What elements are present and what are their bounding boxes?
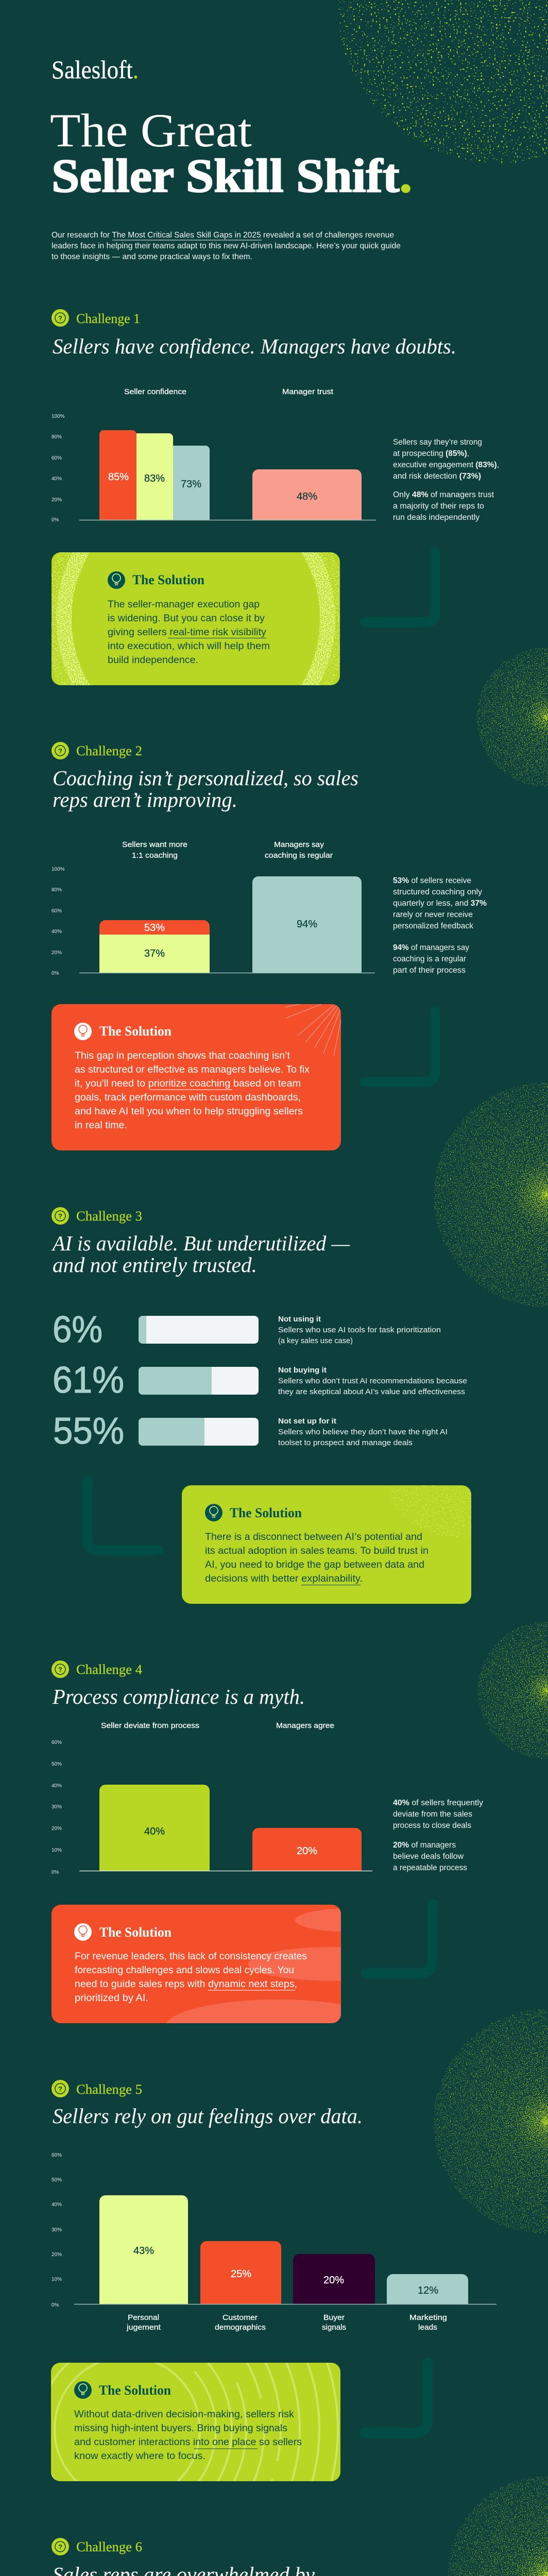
bar chart: seller confidence vs manager trust: 0%	[52, 517, 59, 523]
challenge 3 heading	[51, 1231, 350, 1277]
panel: solution 2: goals, track performance with custom dashboards,	[75, 1092, 301, 1103]
side text: challenge 2: 53% of sellers receive	[393, 876, 471, 885]
bar chart: seller confidence vs manager trust: 40%	[52, 476, 62, 482]
bar chart: process	[52, 1721, 372, 1875]
panel: solution 4: prioritized by AI.	[75, 1992, 148, 2004]
challenge 6 header	[52, 2538, 142, 2555]
stat: not using it	[53, 1309, 441, 1350]
bar chart: seller confidence vs manager trust: 85%	[108, 471, 129, 483]
side text: challenge 2: structured coaching only	[393, 888, 482, 896]
side text: challenge 1: at prospecting (85%),	[393, 449, 469, 458]
bar chart: data sources: 40%	[52, 2202, 62, 2208]
stat: not buying it: Not buying it	[278, 1366, 327, 1375]
challenge 1 heading: Sellers have confidence. Managers have doubts.	[53, 334, 456, 358]
panel: solution 2: and have AI tell you when to help struggling sellers	[75, 1106, 303, 1117]
section: challenge 4	[52, 1660, 483, 2055]
side text: challenge 4	[393, 1799, 483, 1872]
bar chart: process: 30%	[52, 1804, 62, 1810]
panel: solution 2: in real time.	[75, 1120, 127, 1131]
bar chart: data sources: 20%	[323, 2275, 344, 2286]
stat: not set up for it	[53, 1411, 448, 1452]
challenge 2 header: ?	[58, 747, 62, 755]
challenge 4 header: Challenge 4	[76, 1662, 142, 1677]
challenge 4 header: ?	[58, 1666, 62, 1673]
section: challenge 6	[52, 2538, 315, 2576]
connector arrow 4	[366, 1904, 433, 1973]
panel: solution 2: it, you'll need to prioritize coaching based on team	[75, 1078, 301, 1089]
icon: light bulb	[108, 571, 125, 589]
stat: not buying it: Sellers who don’t trust AI recommendations because	[278, 1377, 467, 1385]
challenge 2 heading: Coaching isn’t personalized, so sales	[53, 766, 358, 790]
panel: solution 1: is widening. But you can close it by	[108, 613, 265, 624]
panel: solution 3: its actual adoption in sales teams. To build trust in	[205, 1545, 429, 1556]
bar chart: seller confidence vs manager trust	[52, 387, 376, 523]
challenge 3 header: Challenge 3	[76, 1209, 142, 1224]
side text: challenge 2: personalized feedback	[393, 922, 473, 930]
dot cluster: challenge 6	[447, 2476, 548, 2576]
challenge 2 header: Challenge 2	[76, 743, 142, 758]
panel: solution 2: This gap in perception shows that coaching isn’t	[75, 1050, 290, 1061]
side text: challenge 1: a majority of their reps to	[393, 502, 484, 511]
panel: solution 5	[51, 2363, 340, 2481]
stat: not set up for it: 55%	[53, 1411, 124, 1452]
bar chart: seller confidence vs manager trust: 80%	[52, 434, 62, 440]
side text: challenge 4: a repeatable process	[393, 1863, 467, 1872]
bar chart: seller confidence vs manager trust: 20%	[52, 497, 62, 503]
challenge 3 header	[52, 1207, 142, 1225]
icon: light bulb	[74, 1923, 92, 1941]
bar chart: coaching: 94%	[297, 919, 317, 930]
bar chart: coaching: Sellers want more	[122, 840, 187, 849]
side text: challenge 2: 94% of managers say	[393, 943, 469, 952]
bar chart: data sources: signals	[322, 2323, 346, 2332]
section: challenge 2	[52, 742, 487, 1150]
stat: not using it: Not using it	[278, 1315, 321, 1324]
bar chart: data sources: demographics	[215, 2323, 266, 2332]
title: Seller Skill Shift .	[52, 149, 412, 202]
panel: solution 1: The seller-manager execution gap	[108, 599, 260, 610]
dot cluster: challenge 3	[433, 1081, 548, 1308]
stat: not using it: 6%	[53, 1309, 102, 1350]
bar chart: data sources: 10%	[52, 2277, 62, 2282]
challenge 2 header	[52, 742, 142, 759]
dot cluster: top right	[335, 0, 548, 165]
bar chart: process: 60%	[52, 1740, 62, 1745]
challenge 2 heading	[53, 766, 358, 811]
bar chart: coaching	[52, 840, 375, 976]
side text: challenge 2: quarterly or less, and 37%	[393, 899, 487, 908]
bar chart: coaching: 80%	[52, 887, 62, 893]
panel: solution 3: The Solution	[230, 1505, 302, 1520]
section: challenge 5	[51, 2080, 496, 2481]
bar chart: data sources: 20%	[52, 2252, 62, 2258]
bar chart: data sources: 60%	[52, 2153, 62, 2158]
dot cluster: challenge 2	[476, 647, 548, 787]
challenge 5 header: Challenge 5	[76, 2082, 142, 2097]
icon: light bulb	[74, 1023, 92, 1040]
title	[50, 104, 412, 202]
connector arrow 1	[365, 552, 435, 622]
stat: not buying it: 61%	[53, 1360, 124, 1401]
challenge 1 header: Challenge 1	[76, 311, 140, 326]
challenge 4 header	[52, 1660, 142, 1678]
panel: solution 1: The Solution	[132, 572, 205, 587]
bar chart: process: 40%	[144, 1826, 165, 1837]
connector arrow 2	[365, 1012, 435, 1082]
challenge 4 heading: Process compliance is a myth.	[52, 1685, 305, 1708]
challenge 5 header	[52, 2080, 142, 2097]
bar chart: data sources	[52, 2153, 496, 2332]
bar chart: coaching: 37%	[144, 948, 165, 959]
stat: not set up for it: Not set up for it	[278, 1417, 336, 1426]
intro text: to those insights — and some practical ways to fix them.	[52, 252, 252, 261]
title: The Great	[50, 104, 252, 157]
bar chart: data sources: 0%	[52, 2302, 59, 2308]
side text: challenge 4: 40% of sellers frequently	[393, 1799, 483, 1807]
bar chart: seller confidence vs manager trust: 83%	[144, 473, 165, 484]
panel: solution 3: decisions with better explainability.	[205, 1573, 363, 1584]
challenge 5 heading: Sellers rely on gut feelings over data.	[53, 2104, 363, 2128]
connector arrow 5	[365, 2363, 427, 2433]
side text: challenge 2: part of their process	[393, 966, 466, 975]
bar chart: seller confidence vs manager trust: Manager trust	[282, 387, 334, 396]
section: challenge 3	[52, 1207, 471, 1604]
panel: solution 2	[52, 994, 346, 1150]
bar chart: coaching: 60%	[52, 908, 62, 914]
bar chart: data sources: 25%	[231, 2268, 251, 2280]
bar chart: data sources: leads	[418, 2323, 437, 2332]
challenge 5 header: ?	[58, 2085, 62, 2093]
panel: solution 5: Without data-driven decision-making, sellers risk	[74, 2409, 294, 2420]
bar chart: process: 20%	[297, 1845, 317, 1857]
side text: challenge 4: process to close deals	[393, 1821, 471, 1830]
side text: challenge 1	[393, 438, 499, 522]
intro text: Our research for The Most Critical Sales Skill Gaps in 2025 revealed a set of challenges revenue	[52, 231, 394, 240]
panel: solution 1: into execution, which will help them	[108, 640, 270, 652]
panel: solution 5: and customer interactions into one place so sellers	[74, 2436, 302, 2448]
dot cluster: challenge 5	[433, 2008, 548, 2235]
panel: solution 1: build independence.	[108, 654, 198, 666]
intro text	[52, 231, 401, 261]
icon: light bulb	[205, 1504, 222, 1521]
bar chart: seller confidence vs manager trust: 60%	[52, 455, 62, 461]
panel: solution 5: The Solution	[99, 2383, 172, 2398]
stat: not buying it: they are skeptical about AI’s value and effectiveness	[278, 1387, 465, 1396]
panel: solution 4: The Solution	[99, 1925, 172, 1940]
side text: challenge 1: executive engagement (83%),	[393, 461, 499, 469]
side text: challenge 4: 20% of managers	[393, 1841, 456, 1850]
dot cluster: challenge 4	[477, 1621, 548, 1759]
bar chart: coaching: coaching is regular	[265, 851, 333, 860]
bar chart: data sources: 12%	[418, 2285, 438, 2296]
panel: solution 4: For revenue leaders, this lack of consistency creates	[75, 1951, 307, 1962]
panel: solution 3: AI, you need to bridge the gap between data and	[205, 1559, 424, 1570]
bar chart: coaching: 20%	[52, 950, 62, 956]
panel: solution 5: missing high-intent buyers. Bring buying signals	[74, 2422, 287, 2434]
bar chart: process: 40%	[52, 1783, 62, 1789]
connector arrow 3	[88, 1481, 158, 1550]
side text: challenge 2: coaching is a regular	[393, 955, 466, 963]
side text: challenge 1: Only 48% of managers trust	[393, 490, 494, 499]
side text: challenge 4: believe deals follow	[393, 1852, 464, 1861]
logo: Salesloft.	[52, 55, 139, 84]
stat: not buying it	[53, 1360, 467, 1401]
challenge 1 header: ?	[58, 314, 62, 322]
stat: not set up for it: toolset to prospect and manage deals	[278, 1438, 413, 1447]
bar chart: process: Managers agree	[276, 1721, 334, 1730]
side text: challenge 1: run deals independently	[393, 513, 480, 522]
bar chart: process: Seller deviate from process	[101, 1721, 199, 1730]
stat: not using it: (a key sales use case)	[278, 1336, 353, 1345]
panel: solution 1	[52, 552, 340, 685]
challenge 3 heading: and not entirely trusted.	[53, 1253, 257, 1277]
challenge 2 heading: reps aren’t improving.	[53, 788, 237, 811]
stat: not set up for it: Sellers who believe they don’t have the right AI	[278, 1428, 448, 1436]
side text: challenge 2	[393, 876, 487, 975]
panel: solution 4	[52, 1905, 341, 2023]
bar chart: coaching: 100%	[52, 867, 65, 872]
bar chart: coaching: Managers say	[274, 840, 324, 849]
bar chart: process: 20%	[52, 1826, 62, 1832]
icon: light bulb	[74, 2381, 92, 2399]
intro text: leaders face in helping their teams adapt to this new AI-driven landscape. Here’s your quick guide	[52, 242, 401, 250]
panel: solution 3	[182, 1485, 471, 1604]
bar chart: seller confidence vs manager trust: 48%	[297, 491, 317, 502]
panel: solution 2: The Solution	[99, 1024, 172, 1039]
side text: challenge 1: Sellers say they’re strong	[393, 438, 482, 447]
bar chart: data sources: Customer	[222, 2313, 258, 2322]
bar chart: data sources: Marketing	[409, 2313, 447, 2322]
panel: solution 2: as structured or effective as managers believe. To fix	[75, 1064, 310, 1075]
bar chart: data sources: Personal	[128, 2313, 159, 2322]
panel: solution 1: giving sellers real-time risk visibility	[108, 626, 266, 638]
challenge 6 header: ?	[58, 2543, 62, 2551]
panel: solution 5: know exactly where to focus.	[74, 2450, 206, 2462]
bar chart: seller confidence vs manager trust: 73%	[181, 479, 201, 490]
side text: challenge 1: and risk detection (73%)	[393, 472, 481, 481]
challenge 6 header: Challenge 6	[76, 2539, 142, 2554]
challenge 3 header: ?	[58, 1212, 62, 1220]
panel: solution 4: need to guide sales reps with dynamic next steps,	[75, 1978, 297, 1990]
bar chart: process: 50%	[52, 1761, 62, 1767]
section: challenge 1	[52, 309, 499, 685]
stat: not using it: Sellers who use AI tools for task prioritization	[278, 1326, 441, 1334]
panel: solution 4: forecasting challenges and slows deal cycles. You	[75, 1964, 294, 1976]
bar chart: seller confidence vs manager trust: Seller confidence	[124, 387, 186, 396]
bar chart: coaching: 1:1 coaching	[132, 851, 178, 860]
bar chart: data sources: 30%	[52, 2227, 62, 2233]
side text: challenge 4: deviate from the sales	[393, 1810, 472, 1819]
panel: solution 3: There is a disconnect between AI’s potential and	[205, 1531, 422, 1543]
bar chart: data sources: Buyer	[323, 2313, 345, 2322]
challenge 3 heading: AI is available. But underutilized —	[51, 1231, 350, 1255]
bar chart: coaching: 53%	[144, 922, 165, 934]
bar chart: process: 0%	[52, 1870, 59, 1875]
challenge 1 header	[52, 309, 140, 327]
side text: challenge 2: rarely or never receive	[393, 910, 473, 919]
bar chart: data sources: 43%	[133, 2245, 154, 2257]
bar chart: process: 10%	[52, 1848, 62, 1853]
bar chart: seller confidence vs manager trust: 100%	[52, 414, 65, 419]
bar chart: data sources: 50%	[52, 2177, 62, 2183]
bar chart: coaching: 0%	[52, 971, 59, 976]
bar chart: data sources: jugement	[126, 2323, 161, 2332]
bar chart: coaching: 40%	[52, 929, 62, 935]
